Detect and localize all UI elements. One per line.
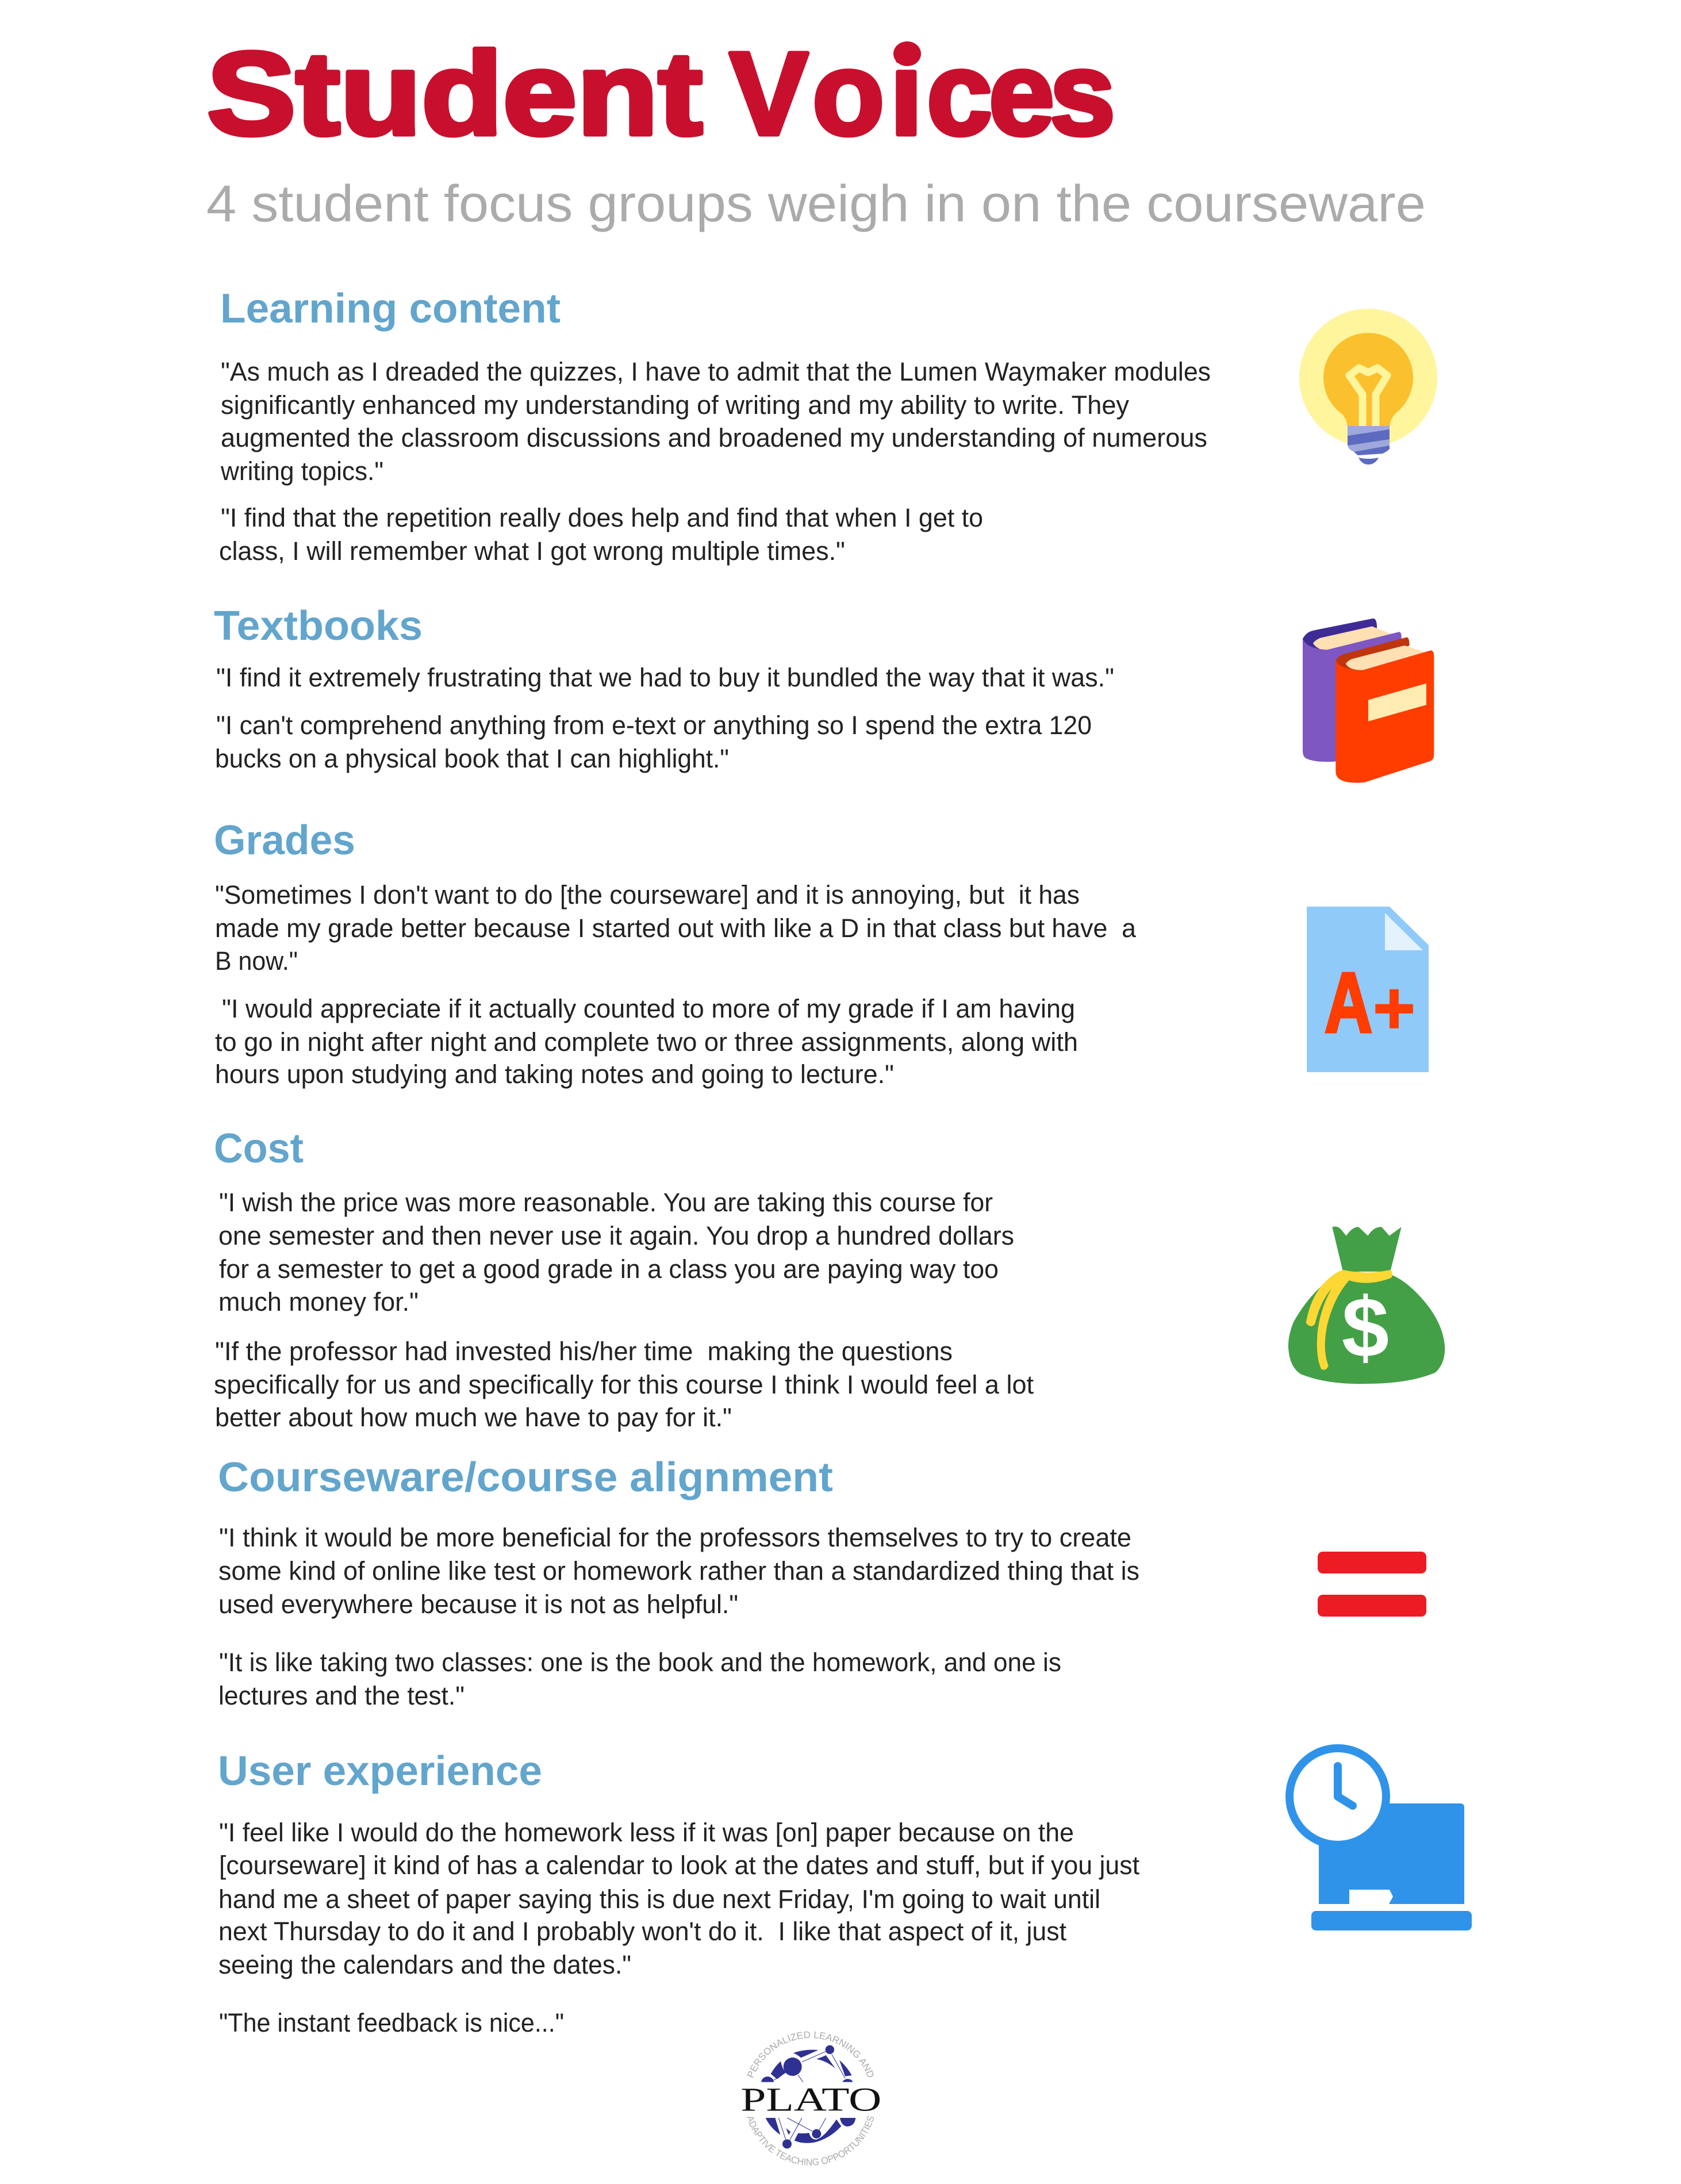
quote: bundled: "I find it extremely frustrating that we had to buy it bundled the way that it was.": [216, 663, 1114, 692]
quote: professor's time: "If the professor had invested his/her time making the questions: [215, 1337, 953, 1366]
icon: graded paper: [1307, 907, 1429, 1072]
quote: calendar: hand me a sheet of paper saying this is due next Friday, I'm going to wait until: [218, 1884, 1100, 1914]
quote: professors create tests: some kind of online like test or homework rather than a standardized thing that is: [218, 1556, 1139, 1586]
quote: professors create tests: "I think it would be more beneficial for the professors themselves to try to create: [219, 1523, 1131, 1552]
quote: professor's time: better about how much we have to pay for it.": [215, 1403, 732, 1432]
logo: PLATO: PLATO: [740, 2081, 881, 2118]
subtitle: 4 student focus groups weigh in on the courseware: [206, 175, 1426, 233]
title: Voices: [730, 28, 1115, 160]
quote: counted to more of grade: hours upon studying and taking notes and going to lecture.": [215, 1060, 894, 1089]
heading: textbooks: Textbooks: [214, 603, 423, 649]
quote: repetition: [219, 503, 983, 566]
quote: physical book: [215, 711, 1092, 773]
quote: physical book: "I can't comprehend anything from e-text or anything so I spend the extra 120: [216, 711, 1092, 740]
quote: physical book: bucks on a physical book that I can highlight.": [215, 744, 729, 773]
panel: courseware/course alignment: [218, 1454, 1139, 1710]
panel: cost: [214, 1126, 1034, 1432]
quote: price: one semester and then never use it again. You drop a hundred dollars: [218, 1221, 1014, 1250]
icon: books: [1303, 619, 1434, 783]
heading: learning content: Learning content: [220, 286, 561, 332]
quote: calendar: "I feel like I would do the homework less if it was [on] paper because on the: [219, 1818, 1074, 1847]
quote: calendar: next Thursday to do it and I probably won't do it. I like that aspect of it, just: [218, 1917, 1066, 1946]
quote: counted to more of grade: "I would appreciate if it actually counted to more of my grade if I am having: [222, 994, 1075, 1023]
icon: laptop with clock: [1285, 1744, 1472, 1930]
quote: repetition: "I find that the repetition really does help and find that when I get to: [221, 503, 983, 532]
quote: quizzes and modules: augmented the classroom discussions and broadened my understanding of numerous: [221, 423, 1207, 452]
quote: counted to more of grade: to go in night after night and complete two or three assignments, along with: [215, 1027, 1078, 1057]
quote: professor's time: [214, 1337, 1034, 1432]
heading: grades: Grades: [214, 817, 355, 863]
title: Student: [207, 28, 703, 160]
quote: quizzes and modules: writing topics.": [220, 456, 383, 486]
quote: repetition: class, I will remember what I got wrong multiple times.": [219, 536, 845, 566]
quote: quizzes and modules: "As much as I dreaded the quizzes, I have to admit that the Lumen Waymaker modules: [221, 357, 1211, 386]
quote: two classes: lectures and the test.": [218, 1681, 465, 1710]
quote: two classes: [218, 1648, 1061, 1710]
quote: quizzes and modules: [220, 357, 1211, 486]
quote: price: for a semester to get a good grade in a class you are paying way too: [219, 1254, 999, 1284]
quote: professors create tests: used everywhere because it is not as helpful.": [218, 1590, 738, 1619]
quote: price: [218, 1188, 1014, 1316]
quote: instant feedback: "The instant feedback is nice...": [219, 2008, 564, 2037]
quote: price: much money for.": [218, 1287, 419, 1316]
heading: alignment: Courseware/course alignment: [218, 1454, 833, 1500]
title: [207, 28, 1115, 160]
quote: grade got better: B now.": [215, 946, 298, 976]
quote: quizzes and modules: significantly enhanced my understanding of writing and my ability to write. They: [221, 390, 1129, 420]
icon: light bulb: [1299, 309, 1437, 465]
icon: money bag: [1288, 1227, 1445, 1384]
panel: user experience: [218, 1748, 1139, 2037]
quote: professors create tests: [218, 1523, 1139, 1619]
quote: grade got better: "Sometimes I don't want to do [the courseware] and it is annoying, but it has: [215, 880, 1080, 909]
quote: professor's time: specifically for us and specifically for this course I think I would feel a lot: [214, 1370, 1034, 1399]
quote: grade got better: made my grade better because I started out with like a D in that class but have a: [215, 913, 1137, 943]
panel: textbooks: [214, 603, 1114, 773]
quote: counted to more of grade: [215, 994, 1078, 1089]
panel: grades: [214, 817, 1137, 1089]
logo: PLATO: ADAPTIVE TEACHING OPPORTUNITIES: [747, 2116, 874, 2166]
panel: learning content: [219, 286, 1211, 566]
icon: graded paper: +: [1373, 966, 1415, 1050]
quote: grade got better: [215, 880, 1137, 976]
logo: PLATO: PERSONALIZED LEARNING AND: [747, 2032, 874, 2078]
heading: user experience: User experience: [218, 1748, 542, 1794]
quote: calendar: seeing the calendars and the dates.": [218, 1950, 631, 1979]
icon: money bag: $: [1342, 1280, 1389, 1375]
quote: calendar: [218, 1818, 1139, 1979]
icon: equals sign: [1318, 1552, 1426, 1617]
quote: two classes: "It is like taking two classes: one is the book and the homework, and one is: [219, 1648, 1061, 1677]
heading: cost: Cost: [214, 1126, 304, 1172]
quote: calendar: [courseware] it kind of has a calendar to look at the dates and stuff, but if you just: [219, 1851, 1139, 1880]
icon: graded paper: A: [1325, 955, 1372, 1050]
logo: PLATO: [740, 2032, 881, 2166]
quote: price: "I wish the price was more reasonable. You are taking this course for: [219, 1188, 993, 1217]
